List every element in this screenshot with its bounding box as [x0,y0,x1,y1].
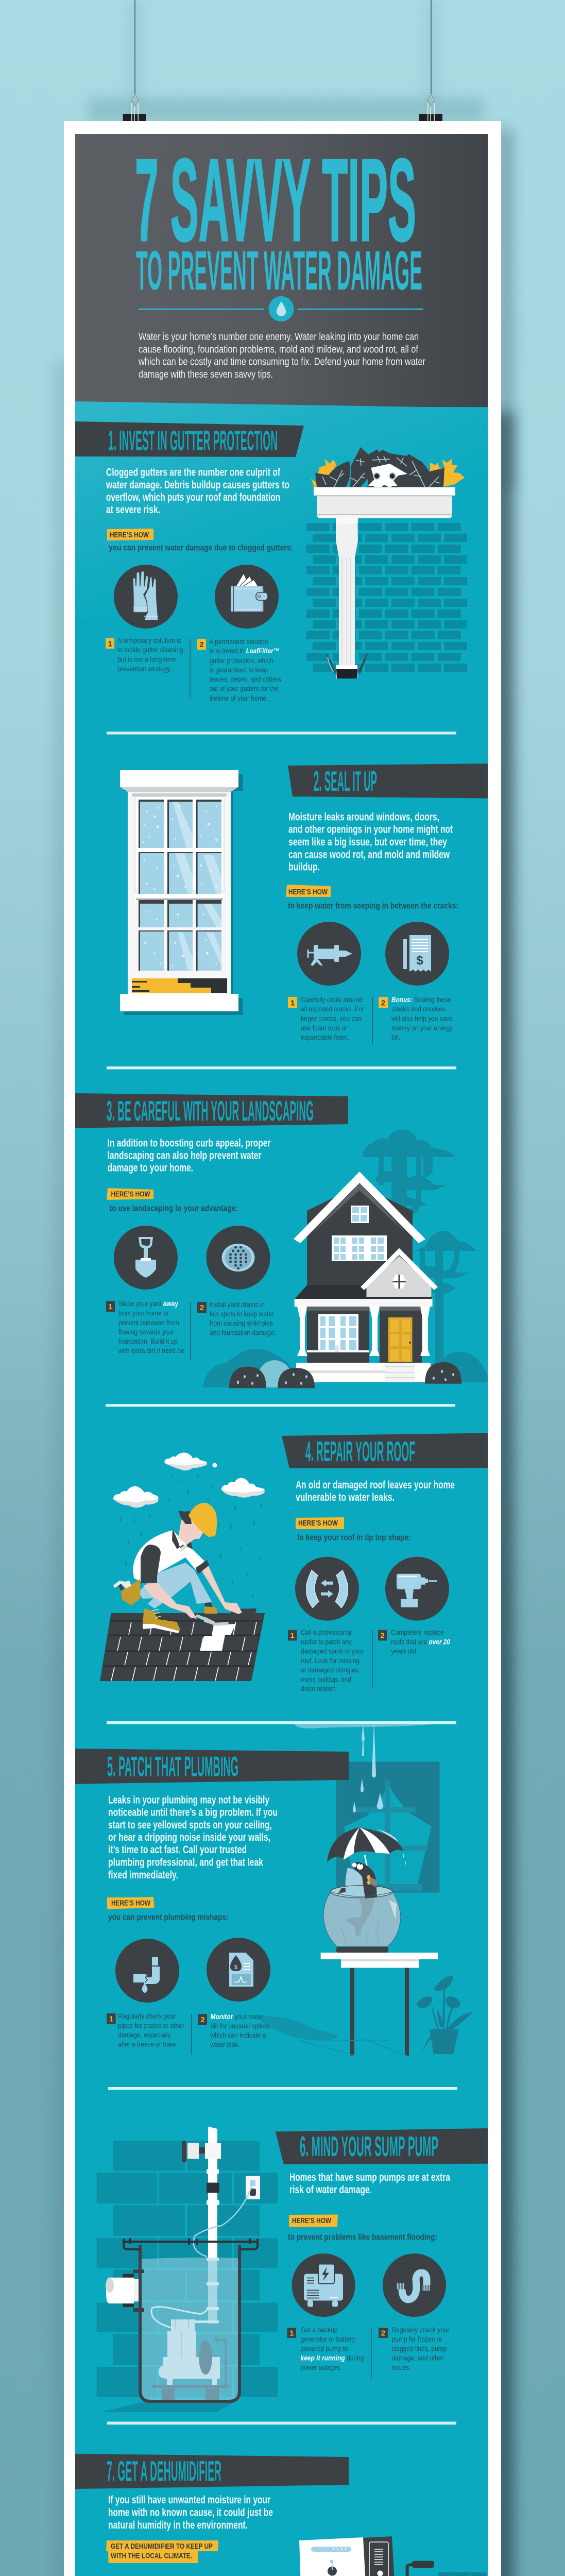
step 2 [379,995,453,1041]
step 2: Install yard drains in [210,1300,265,1309]
section 2: seal it up [107,764,488,1070]
heading banner 4 [282,1433,488,1468]
step 2: A permanent solution [209,637,268,646]
inlet pipe [123,2274,134,2307]
heading banner 2: 2. SEAL IT UP [314,765,377,797]
step 1: 1 [108,1302,113,1311]
step 1 [106,1299,186,1354]
section 7: dehumidifier [75,2454,488,2576]
step 1: after a freeze or thaw. [118,2040,177,2048]
step 2: gutter protection, which [209,656,273,665]
icon: drill [385,1557,449,1621]
potted plant [416,1976,473,2056]
body text 7: home with no known cause, it could just be [108,2507,273,2519]
step 1: Carefully caulk around [301,995,363,1004]
step 1: larger cracks, you can [301,1014,362,1022]
body text 2 [288,811,453,873]
step 2 [197,637,281,702]
step 1: roof. Look for missing [301,1656,359,1665]
step 1: but is not a long-term [117,655,177,664]
body text 5: fixed immediately. [108,1869,178,1881]
step 2: roofs that are over 20 [391,1637,450,1646]
separator 2 [107,1066,456,1070]
illustration: sump pump pit [97,2127,278,2412]
step 1: power outages. [301,2363,342,2371]
roof shingles [100,1608,265,1681]
step 1: or damaged shingles, [301,1666,360,1674]
table [321,1953,438,2056]
header panel [75,134,488,618]
step 2: from causing sinkholes [210,1319,273,1327]
sub heading: to use landscaping to your advantage: [110,1204,238,1213]
step 1: powered pump to [301,2344,348,2352]
here's how tag [107,1188,153,1200]
step 2: 2 [200,2015,205,2024]
here's how tag: HERE’S HOW [292,2216,332,2225]
step 2: bill. [391,1033,400,1041]
poster white paper [64,121,501,2576]
step 2: 2 [380,1631,385,1640]
sub heading: to keep water from seeping in between the cracks: [288,901,458,911]
here's how tag [286,885,331,897]
here's how tag: HERE’S HOW [111,1899,151,1907]
body text 2: Moisture leaks around windows, doors, [288,811,439,823]
body text 6: risk of water damage. [289,2184,372,2196]
brick wall [97,2141,278,2397]
body text 3 [107,1138,271,1174]
yellow callout: WITH THE LOCAL CLIMATE. [111,2551,192,2561]
heading banner 7: 7. GET A DEHUMIDIFIER [107,2455,221,2487]
icon: sink trap [383,2253,446,2317]
heading banner 5: 5. PATCH THAT PLUMBING [107,1751,238,1783]
step 1: with extra dirt if need be. [118,1346,186,1354]
body text 1: Clogged gutters are the number one culprit of [106,467,281,478]
body text 1: overflow, which puts your roof and foundation [106,492,280,503]
intro text [138,331,425,380]
illustration: leaky window, umbrella, fish bowl and table [258,1721,473,2056]
step 2: water leak. [210,2040,240,2048]
step 1: damaged spots in your [301,1647,364,1655]
step 2: out of your gutters for the [209,684,279,692]
step 1: keep it running during [301,2354,364,2362]
step 1: generator or battery [301,2335,355,2343]
body text 5: noticeable until there’s a big problem. If you [108,1807,278,1819]
step 2 [197,1300,276,1337]
step 2: which can indicate a [210,2031,266,2039]
step 1: 1 [290,998,295,1008]
section 6: sump pump [97,2127,488,2425]
body text 5 [108,1794,278,1881]
body text 2: and other openings in your home might not [288,824,453,836]
fish and bowl [323,1862,401,1953]
step 2: and foundation damage. [210,1329,276,1337]
step 2: 2 [381,2329,385,2338]
illustration: dehumidifier in shopping cart [260,2536,434,2576]
step 1: Slope your yard away [118,1299,178,1308]
step 1: pipes for cracks or other [118,2021,184,2029]
outlet [246,2176,260,2199]
sub heading: to keep your roof in tip top shape: [297,1532,411,1543]
hanging string and clip left [123,0,146,129]
step 1: roofer to patch any [301,1637,352,1646]
basin [140,2245,239,2401]
section 1: gutter protection [75,421,468,735]
step 1: Regularly check your [118,2012,176,2020]
umbrella [327,1827,406,1875]
heading banner 1 [75,421,304,457]
step 1 [106,636,185,673]
icon: gloves [114,565,178,629]
step 1: 1 [289,2329,294,2338]
cart [260,2561,434,2576]
teal poster panel [75,392,488,2576]
step 2: cracks and crevices [391,1005,446,1013]
step 2: is guaranteed to keep [209,666,269,674]
step 2: Bonus: Sealing these [391,995,451,1004]
store shelves background [75,2572,488,2576]
separator 1 [107,732,456,735]
divider with water drop icon [139,296,423,321]
water drops [353,1721,383,1812]
roofer figure [113,1503,242,1633]
body text 2: buildup. [288,861,320,873]
step 2: bill for unusual spikes, [210,2022,271,2030]
step 1: discoloration. [301,1684,337,1692]
step 1: expandable foam. [301,1033,349,1041]
step 1: foundation. Build it up [118,1337,178,1345]
body text 4 [296,1479,455,1503]
icon: yard drain [206,1226,270,1290]
here's how tag: HERE’S HOW [110,531,149,539]
intro text: damage with these seven savvy tips. [139,369,273,380]
step 2: will also help you save [391,1014,453,1022]
icon: wallet [215,565,279,629]
heading banner 5 [75,1749,349,1784]
step 1: Get a backup [301,2326,338,2334]
body text 3: landscaping can also help prevent water [107,1150,262,1162]
step 1: use foam rods or [301,1024,347,1032]
heading banner 3 [75,1093,348,1128]
body text 7 [108,2494,273,2531]
step 2 [378,1628,450,1655]
body text 1 [106,467,289,516]
here's how tag: HERE’S HOW [298,1519,338,1528]
body text 3: damage to your home. [107,1162,193,1174]
cloud right [221,1478,265,1498]
step 2: money on your energy [391,1024,453,1032]
icon: shovel [114,1226,178,1290]
body text 1: water damage. Debris buildup causes gutters to [106,479,289,491]
step 1: flowing towards your [118,1328,174,1336]
body text 2: can cause wood rot, and mold and mildew [288,849,450,860]
step 2: years old. [391,1647,418,1655]
body text 6: Homes that have sump pumps are at extra [289,2172,450,2183]
section 3: landscaping [75,1093,488,1406]
yellow callout: GET A DEHUMIDIFIER TO KEEP UP [111,2542,213,2551]
body text 4: vulnerable to water leaks. [296,1492,395,1503]
intro text: Water is your home’s number one enemy. Water leaking into your home can [139,331,419,343]
icon: water bill [207,1938,270,2002]
cloud center [164,1453,217,1470]
step 1: moss buildup, and [301,1675,351,1683]
intro text: which can be costly and time consuming to fix. Defend your home from water [138,357,425,368]
body text 1: at severe risk. [106,504,160,516]
heading banner 7 [75,2454,349,2489]
here's how tag: HERE’S HOW [288,888,328,896]
step 2: Regularly check your [391,2326,450,2334]
separator 5 [108,2087,457,2090]
step 2 [198,2012,271,2048]
step 2: leaves, debris, and critters [209,675,281,683]
here's how tag: HERE’S HOW [111,1190,150,1198]
icon: generator [292,2253,355,2317]
sub heading: to prevent problems like basement flooding: [288,2232,437,2242]
here's how tag [107,529,153,540]
step 2: 2 [200,1303,204,1312]
here's how tag [107,1897,155,1909]
step 2: 2 [199,640,204,649]
icon: caulk gun [297,922,361,986]
step 2 [379,2326,450,2371]
section 5: plumbing [75,1721,473,2090]
step 2: Monitor your water [210,2012,264,2021]
step 1: prevention strategy. [117,665,172,673]
body text 5: plumbing professional, and get that leak [108,1857,263,1869]
body text 2: seem like a big issue, but over time, they [288,836,447,848]
heading banner 6 [276,2128,488,2164]
body text 7: natural humidity in the environment. [108,2519,248,2531]
intro text: cause flooding, foundation problems, mold and mildew, and wood rot, all of [139,344,418,355]
hanging string and clip right [419,0,442,129]
step 1: prevent rainwater from [118,1318,179,1327]
step 1: 1 [109,2014,113,2024]
icon: receipt [385,922,449,986]
step 1 [107,2012,184,2048]
body text 6 [289,2172,450,2196]
step 1: all exposed cracks. For [301,1005,364,1013]
illustration: gutter, leaves and cat [306,447,468,679]
yellow callout [106,2540,218,2563]
discharge pipe and valve [208,2127,217,2259]
body text 5: Leaks in your plumbing may not be visibly [108,1794,269,1806]
sub heading: you can prevent plumbing mishaps: [108,1912,229,1922]
here's how tag [296,1517,344,1529]
step 2: issues. [391,2363,411,2371]
icon: receipt: $ [416,954,423,968]
step 2: 2 [381,998,385,1008]
water in the pit [141,2258,238,2400]
body text 4: An old or damaged roof leaves your home [296,1479,455,1491]
section 4: roof [100,1433,488,1728]
step 2: clogged lines, pump [391,2344,447,2352]
separator 6 [107,2421,456,2425]
cloud left [113,1486,159,1508]
body text 7: If you still have unwanted moisture in your [108,2494,270,2506]
step 1: to tackle gutter cleaning, [117,646,185,654]
body text 5: it’s time to act fast. Call your trusted [108,1844,247,1856]
separator 4 with leak [107,1721,456,1728]
step 2: damage, and other [391,2354,444,2362]
step 2: pump for frozen or [391,2335,442,2343]
body text 5: start to see yellowed spots on your ceiling, [108,1819,272,1831]
separator 3 [106,1404,455,1406]
body text 5: or hear a dripping noise inside your walls, [108,1832,270,1843]
icon: phone handsets [295,1557,359,1621]
sub heading: you can prevent water damage due to clogged gutters: [109,543,293,552]
step 1: Call a professional [301,1628,351,1636]
icon: leaking pipe [115,1939,179,2003]
body text 3: In addition to boosting curb appeal, proper [107,1138,271,1149]
here's how tag [289,2214,338,2227]
step 1: damage, especially [118,2031,171,2039]
step 2: is to invest in LeafFilter™ [209,647,279,655]
step 1: from your home to [118,1309,168,1317]
step 2: lifetime of your home. [209,694,268,702]
step 1 [287,2326,364,2371]
illustration: house, trees and bushes [203,1129,488,1388]
illustration: rainy window [120,770,243,1015]
icon: water bill: $ [234,1964,237,1971]
illustration: roofer on rainy roof [100,1453,265,1681]
step 1 [288,995,364,1041]
step 1: 1 [108,640,112,648]
pump unit [159,2319,220,2385]
step 1: A temporary solution is [117,636,181,645]
step 1: 1 [290,1631,295,1640]
step 1 [288,1628,364,1692]
step 2: Completely replace [391,1628,444,1636]
step 2: low spots to keep water [210,1310,274,1318]
